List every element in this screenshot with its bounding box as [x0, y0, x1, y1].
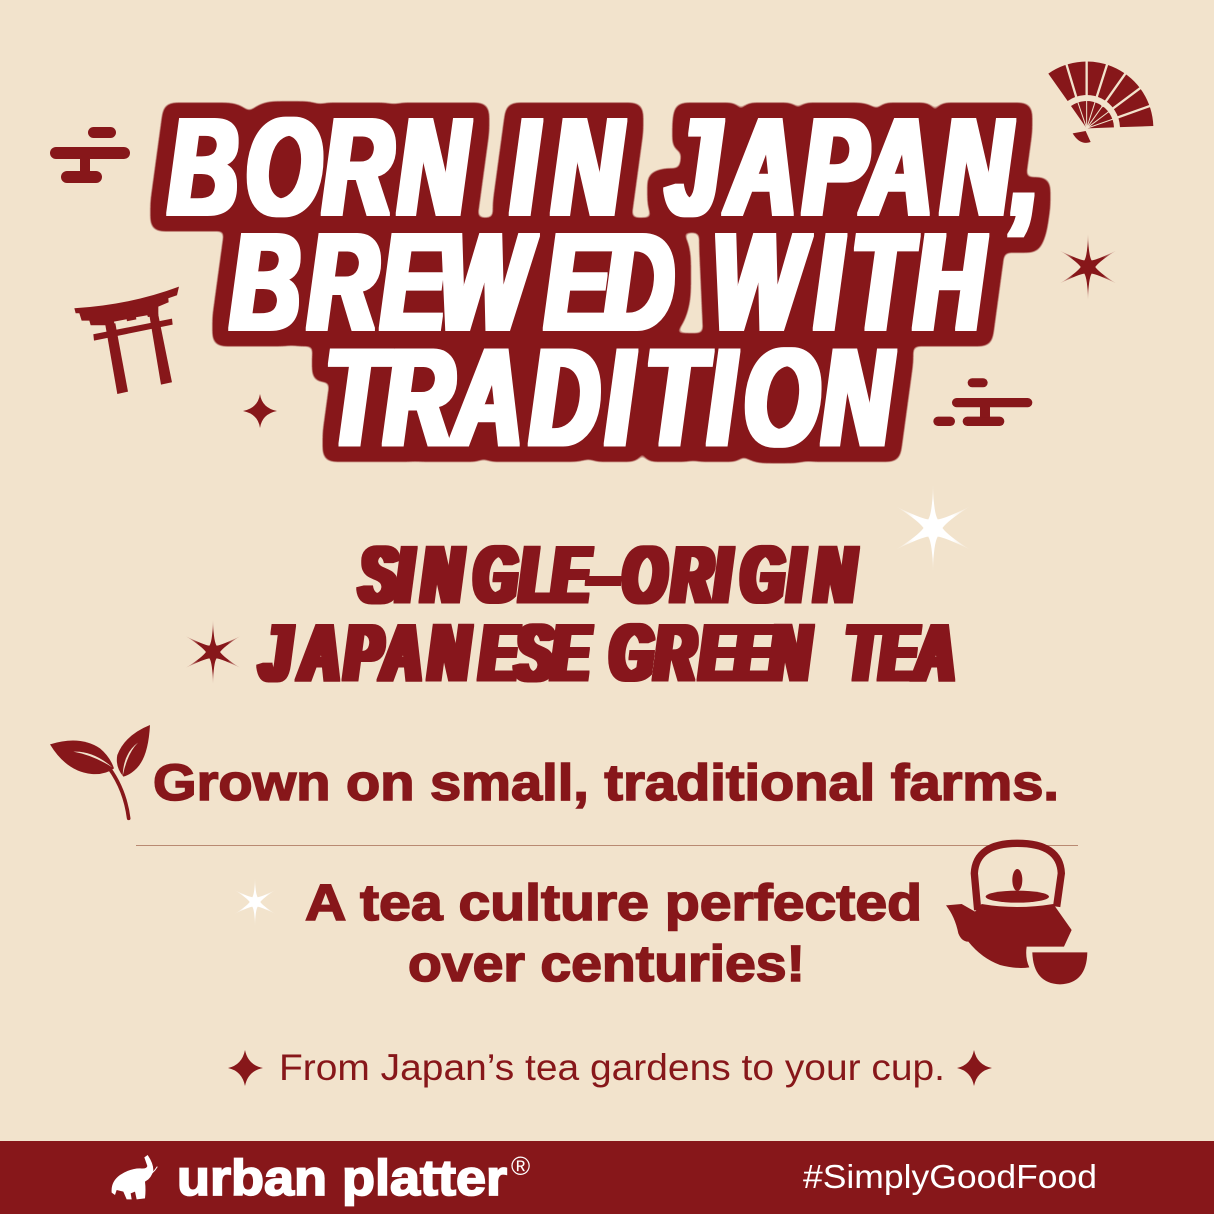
icon: cloud left	[50, 127, 130, 183]
footer bar	[0, 1141, 1214, 1214]
icon: elephant logo	[112, 1155, 157, 1199]
title: BORN IN JAPAN,	[168, 91, 1039, 245]
subheading: JAPANESE GREEN TEA	[260, 607, 955, 698]
icon: torii gate	[74, 287, 179, 394]
title: TRADITION	[325, 321, 894, 475]
tagline: From Japan’s tea gardens to your cup.	[279, 1047, 945, 1088]
icon: cloud right	[933, 378, 1032, 426]
registered mark: ®	[511, 1151, 530, 1181]
icon: white star large	[897, 485, 969, 571]
icon: six-point star left	[186, 620, 240, 684]
text: grown on small farms: Grown on small, traditional farms.	[153, 754, 1059, 811]
text: tea culture: A tea culture perfected	[305, 874, 922, 931]
icon: teapot and cup	[946, 843, 1087, 984]
title	[168, 91, 1039, 475]
icon: folding fan	[1048, 58, 1153, 143]
icon: sparkle right of tagline	[957, 1050, 992, 1086]
icon: small white star	[235, 878, 275, 926]
divider	[136, 845, 1078, 846]
icon: four-point sparkle	[243, 394, 277, 428]
icon: six-point star right	[1060, 234, 1116, 300]
hashtag: #SimplyGoodFood	[803, 1158, 1097, 1195]
icon: tea leaves	[50, 725, 150, 818]
text: tea culture	[305, 874, 922, 992]
brand name: urban platter	[177, 1150, 507, 1206]
subheading	[260, 529, 955, 698]
title: BREWED WITH	[231, 206, 986, 360]
icon: sparkle left of tagline	[228, 1050, 263, 1086]
text: tea culture: over centuries!	[408, 935, 805, 992]
subheading: SINGLE–ORIGIN	[360, 529, 856, 620]
